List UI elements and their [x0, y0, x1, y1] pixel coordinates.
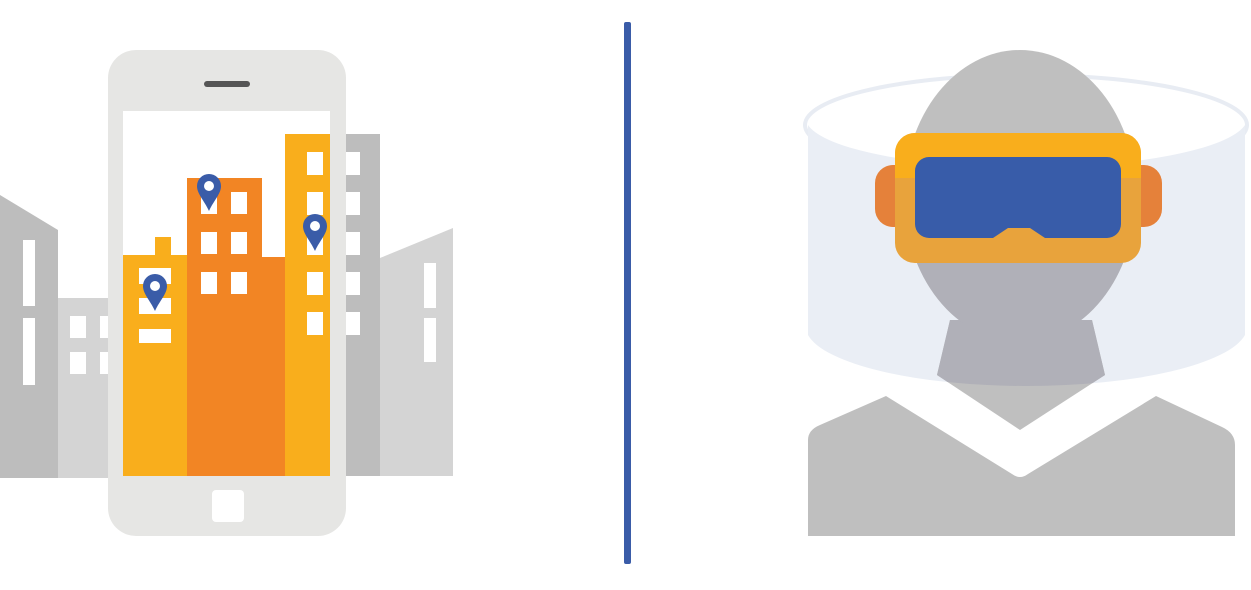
divider: [624, 22, 631, 564]
screen buildings: [123, 134, 330, 476]
panel: city AR phone: [0, 50, 453, 536]
head: [904, 50, 1136, 430]
building: far right: [380, 228, 453, 476]
head inside band: [917, 263, 1123, 386]
shoulders: [808, 396, 1235, 536]
panel: VR user: [805, 50, 1247, 536]
building: low left: [58, 298, 118, 478]
phone: [108, 50, 346, 536]
cylinder ring: [805, 75, 1247, 175]
icon: VR goggles: [875, 133, 1162, 263]
building: behind phone right: [320, 134, 380, 476]
icon: location pins: [143, 174, 327, 311]
building: far left: [0, 195, 58, 478]
cylinder band: [808, 125, 1245, 386]
